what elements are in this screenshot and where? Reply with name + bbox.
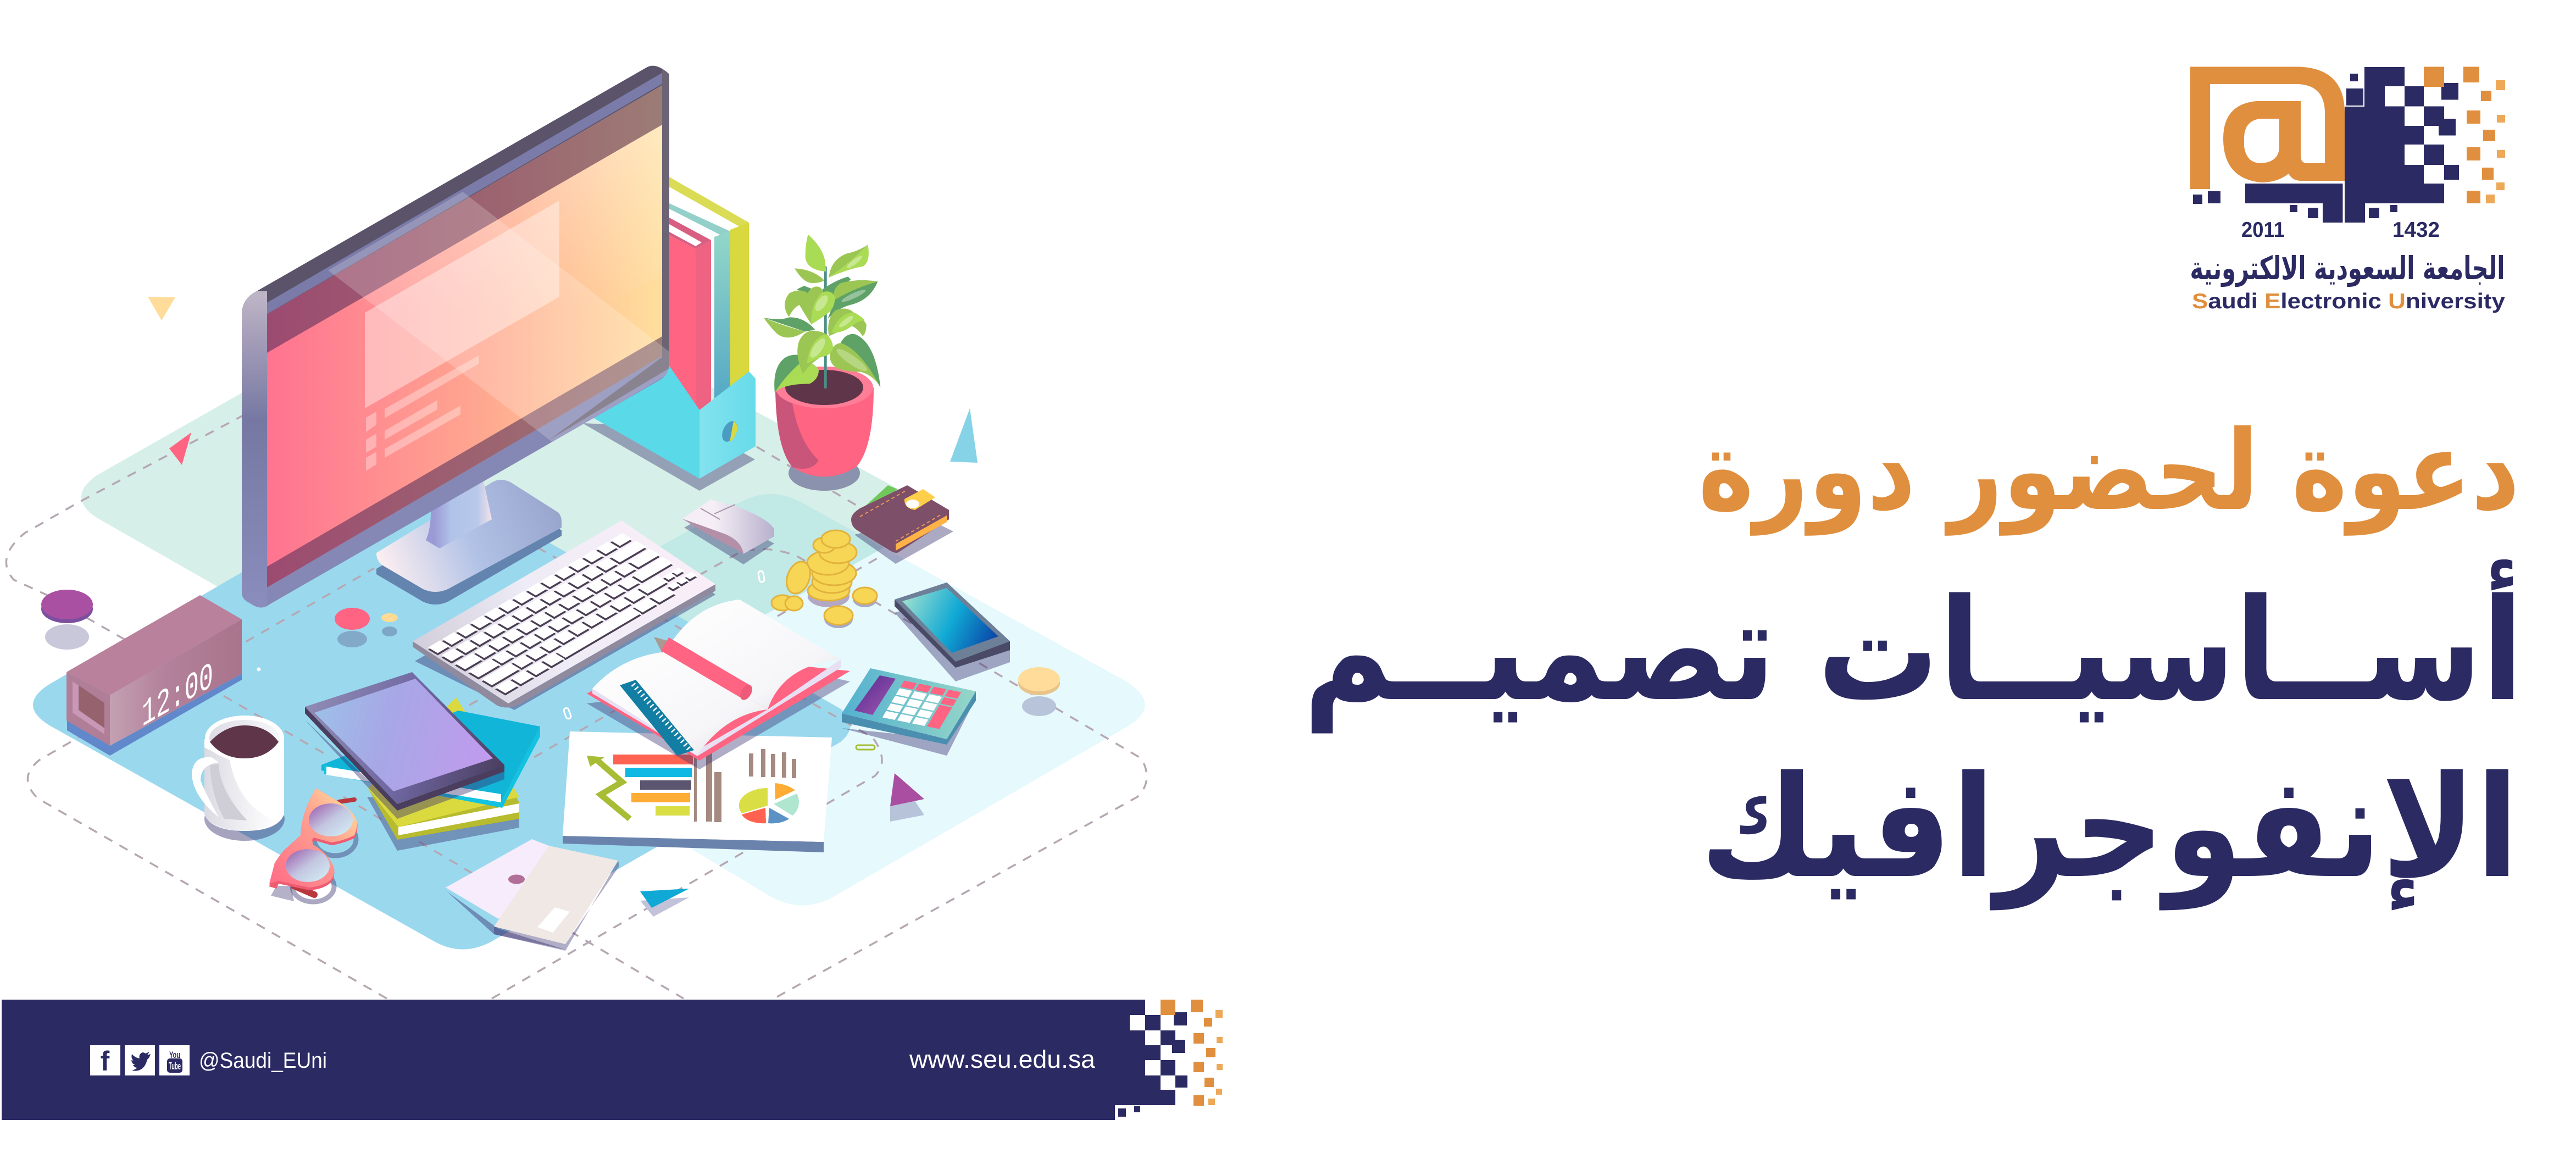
icon: youtube bbox=[159, 1045, 190, 1075]
icon: youtube: You bbox=[169, 1050, 180, 1060]
dashed connector lines bbox=[6, 341, 1147, 999]
triangle: blue with shadow bbox=[640, 889, 689, 917]
chart: horizontal bars bbox=[613, 755, 693, 816]
alarm clock bbox=[66, 595, 242, 756]
background: blue diamond bbox=[33, 469, 851, 950]
triangle: cyan bbox=[950, 408, 978, 463]
chart: zigzag arrow bbox=[587, 756, 630, 819]
mouse bbox=[682, 500, 774, 564]
calculator bbox=[842, 668, 976, 756]
file box with binders bbox=[582, 177, 756, 491]
tablet bbox=[305, 672, 504, 819]
logo: year 2011: 2011 bbox=[2241, 218, 2285, 242]
monitor screen bbox=[267, 85, 662, 587]
triangle: red bbox=[169, 432, 191, 465]
website: www.seu.edu.sa bbox=[909, 1045, 1096, 1073]
icon: youtube: Tube bbox=[169, 1061, 181, 1072]
chart: vertical bars bbox=[694, 749, 796, 822]
triangle: yellow bbox=[148, 297, 175, 320]
social handle: @Saudi_EUni bbox=[199, 1049, 327, 1073]
band pixel squares: orange bbox=[1161, 1000, 1223, 1106]
icon: twitter bbox=[125, 1045, 155, 1075]
keyboard bbox=[413, 520, 715, 710]
clock time: 12:00 bbox=[142, 655, 213, 737]
monitor stand bbox=[376, 480, 562, 605]
background: light cyan diamond bbox=[429, 494, 1145, 906]
books stack bbox=[321, 697, 540, 851]
disc: yellow bbox=[1018, 667, 1060, 716]
icon: facebook: f bbox=[101, 1046, 110, 1077]
logo: english name: Saudi Electronic University bbox=[2192, 290, 2505, 313]
plant leaves bbox=[764, 235, 880, 393]
cup bbox=[192, 716, 285, 841]
triangle: purple with shadow bbox=[890, 773, 924, 822]
disc: purple bbox=[41, 590, 93, 650]
plant in pot bbox=[764, 235, 880, 491]
keyboard keys bbox=[426, 532, 703, 696]
coins bbox=[771, 530, 877, 628]
background: mint diamond bbox=[81, 262, 935, 753]
chart: pie bbox=[739, 783, 799, 823]
discs: red and yellow dots bbox=[257, 608, 398, 672]
footer band bbox=[2, 1000, 1223, 1120]
chart paper bbox=[563, 731, 832, 852]
monitor bbox=[236, 49, 676, 610]
glasses bbox=[269, 788, 357, 902]
wallet bbox=[851, 485, 953, 564]
logo: orange at sign bbox=[2190, 67, 2345, 189]
logo: year 1432: 1432 bbox=[2392, 218, 2440, 242]
ruler bbox=[620, 680, 694, 756]
phone bbox=[895, 583, 1010, 681]
logo: navy pixels bbox=[2193, 67, 2459, 223]
envelope bbox=[446, 839, 619, 951]
band pixel squares: navy bbox=[1118, 1012, 1187, 1117]
monitor bezel bbox=[236, 49, 676, 610]
icon: facebook bbox=[90, 1045, 120, 1077]
open notebook bbox=[587, 600, 850, 769]
pencil bbox=[654, 637, 754, 702]
screen reflection bbox=[328, 192, 669, 442]
paper clips bbox=[563, 570, 875, 750]
university logo bbox=[2190, 67, 2505, 313]
screen window and list bbox=[365, 201, 559, 471]
logo: orange pixels bbox=[2424, 67, 2505, 203]
